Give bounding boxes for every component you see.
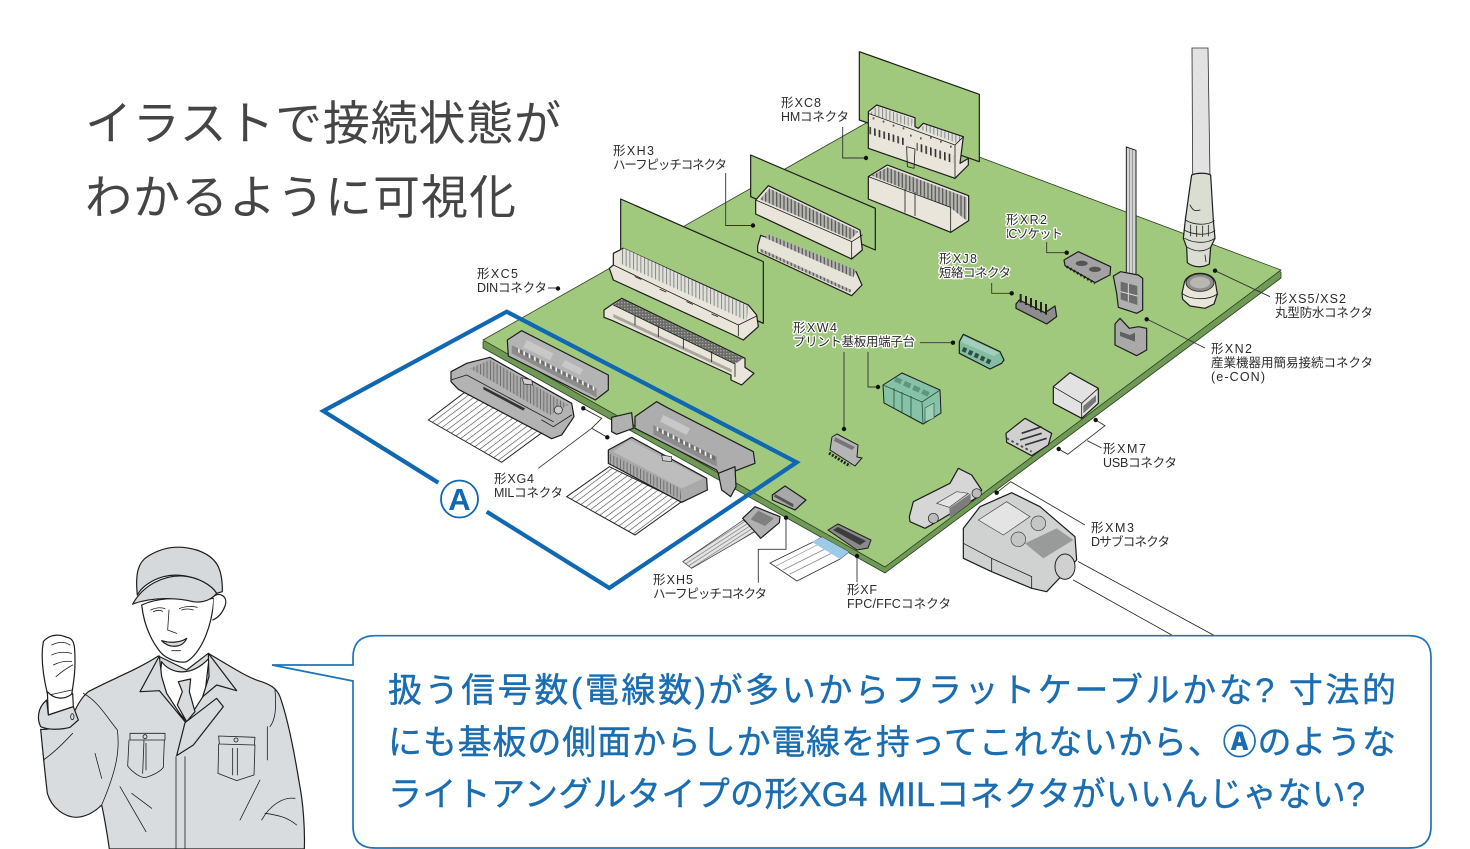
label XR2 [1006, 213, 1063, 241]
label XC8: HMコネクタ [781, 110, 849, 124]
connector XM3 plug [963, 493, 1213, 635]
label XM3: Dサブコネクタ [1091, 534, 1170, 549]
XS5 plug [1183, 173, 1215, 267]
connector XS5 round waterproof plug and socket [1182, 48, 1217, 308]
label XM3: 形XM3 [1091, 521, 1134, 535]
label XG4: 形XG4 [494, 472, 534, 486]
worker character [38, 547, 304, 849]
label XG4 [494, 472, 563, 500]
leader lines and dots [538, 127, 1270, 583]
connector XC5 upper and lower [604, 248, 758, 385]
face [142, 594, 226, 662]
connector small header [829, 434, 862, 466]
label XJ8: 短絡コネクタ [939, 266, 1011, 280]
connector XR2 IC socket [1064, 252, 1111, 283]
daughter card XC8 [859, 52, 979, 162]
label XF: FPC/FFCコネクタ [847, 597, 951, 611]
label XC5 [477, 267, 547, 295]
speech text: 扱う信号数(電線数)が多いからフラットケーブルかな? 寸法的 [388, 672, 1396, 710]
label XN2: (e-CON) [1211, 370, 1265, 384]
connector XM7 RJ [1053, 373, 1098, 418]
jacket [41, 653, 304, 849]
label XR2: ICソケット [1006, 227, 1063, 241]
blue selection frame A [323, 312, 797, 588]
label XH3: ハーフピッチコネクタ [613, 158, 727, 172]
connector XM3 on board [909, 468, 982, 528]
connectors on right side of board [909, 147, 1213, 635]
connector XH3 [751, 155, 875, 296]
fist and cuff [38, 635, 78, 729]
connectors: XC8 and XH3 daughter boards, XC5 card [621, 52, 979, 323]
label XW4 [793, 321, 915, 349]
label XH5 [653, 573, 767, 601]
label XH3: 形XH3 [613, 144, 654, 158]
label XM3 [1091, 521, 1170, 549]
XC5 upper connector [609, 248, 758, 340]
XG4 cable connector one [451, 357, 574, 439]
connector XW4 [959, 334, 1004, 369]
label XW4: プリント基板用端子台 [793, 334, 915, 349]
connector module block [883, 373, 941, 424]
label XS5/XS2: 形XS5/XS2 [1275, 292, 1346, 306]
speech bubble [272, 636, 1431, 848]
title: わかるように可視化 [85, 159, 516, 228]
title: イラストで接続状態が [85, 85, 561, 154]
XS5 socket [1182, 273, 1217, 308]
label XF: 形XF [847, 583, 877, 597]
label XH3 [613, 144, 727, 172]
label XN2: 形XN2 [1211, 342, 1252, 356]
cap [133, 547, 222, 604]
label XM7: 形XM7 [1103, 442, 1146, 456]
connector XM7 USB [1006, 418, 1052, 456]
XS5 cable [1192, 48, 1210, 177]
label XS5/XS2: 丸型防水コネクタ [1275, 305, 1373, 320]
label XC8 [781, 96, 849, 124]
connector XF FPC/FFC [770, 524, 871, 581]
XG4 cable connector two [608, 437, 707, 502]
label XH5: ハーフピッチコネクタ [653, 587, 767, 601]
label XC5: 形XC5 [477, 267, 518, 281]
label XC8: 形XC8 [781, 96, 821, 110]
label XR2: 形XR2 [1006, 213, 1047, 227]
label XN2 [1211, 342, 1373, 384]
label XF [847, 583, 951, 611]
label XM7: USBコネクタ [1103, 456, 1177, 470]
speech text [388, 672, 1396, 814]
label XJ8: 形XJ8 [939, 252, 977, 266]
XC5 lower connector [604, 298, 754, 385]
badge A [441, 480, 478, 518]
daughter card XC5 [621, 199, 763, 323]
shirt and tie [160, 658, 209, 722]
label XN2: 産業機器用簡易接続コネクタ [1211, 355, 1373, 370]
label XC5: DINコネクタ [477, 281, 547, 295]
label XG4: MILコネクタ [494, 486, 563, 500]
label XS5/XS2 [1275, 292, 1373, 320]
XG4 latched header [612, 402, 755, 497]
XG4 ribbon cable one [428, 388, 543, 462]
XH5 board connector [772, 486, 806, 510]
speech text: ライトアングルタイプの形XG4 MILコネクタがいいんじゃない? [388, 776, 1365, 814]
XH5 ribbon and plug [683, 507, 780, 568]
connector group A: XG4 MIL connectors with ribbon cables [428, 331, 806, 568]
XG4 board header [507, 331, 608, 400]
collar [140, 653, 237, 756]
XC8 upper socket [868, 105, 968, 178]
pockets [128, 733, 255, 781]
connector XC8 socket and header [868, 105, 969, 232]
connector XJ8 [1016, 294, 1057, 324]
label XW4: 形XW4 [793, 321, 837, 335]
label XM7 [1103, 442, 1177, 470]
XG4 ribbon cable two [567, 467, 682, 535]
badge A: A [448, 482, 471, 517]
circuit board [483, 118, 1281, 573]
label XH5: 形XH5 [653, 573, 693, 587]
jacket creases [43, 690, 297, 849]
speech text: にも基板の側面からしか電線を持ってこれないから、Ⓐのような [388, 724, 1396, 762]
connector XN2 socket [1115, 318, 1147, 356]
XC8 lower header [868, 165, 969, 232]
connector XN2 plug with wires [1113, 147, 1143, 313]
label XJ8 [939, 252, 1011, 280]
cable for XM3 plug [1073, 562, 1213, 635]
title [85, 85, 561, 228]
